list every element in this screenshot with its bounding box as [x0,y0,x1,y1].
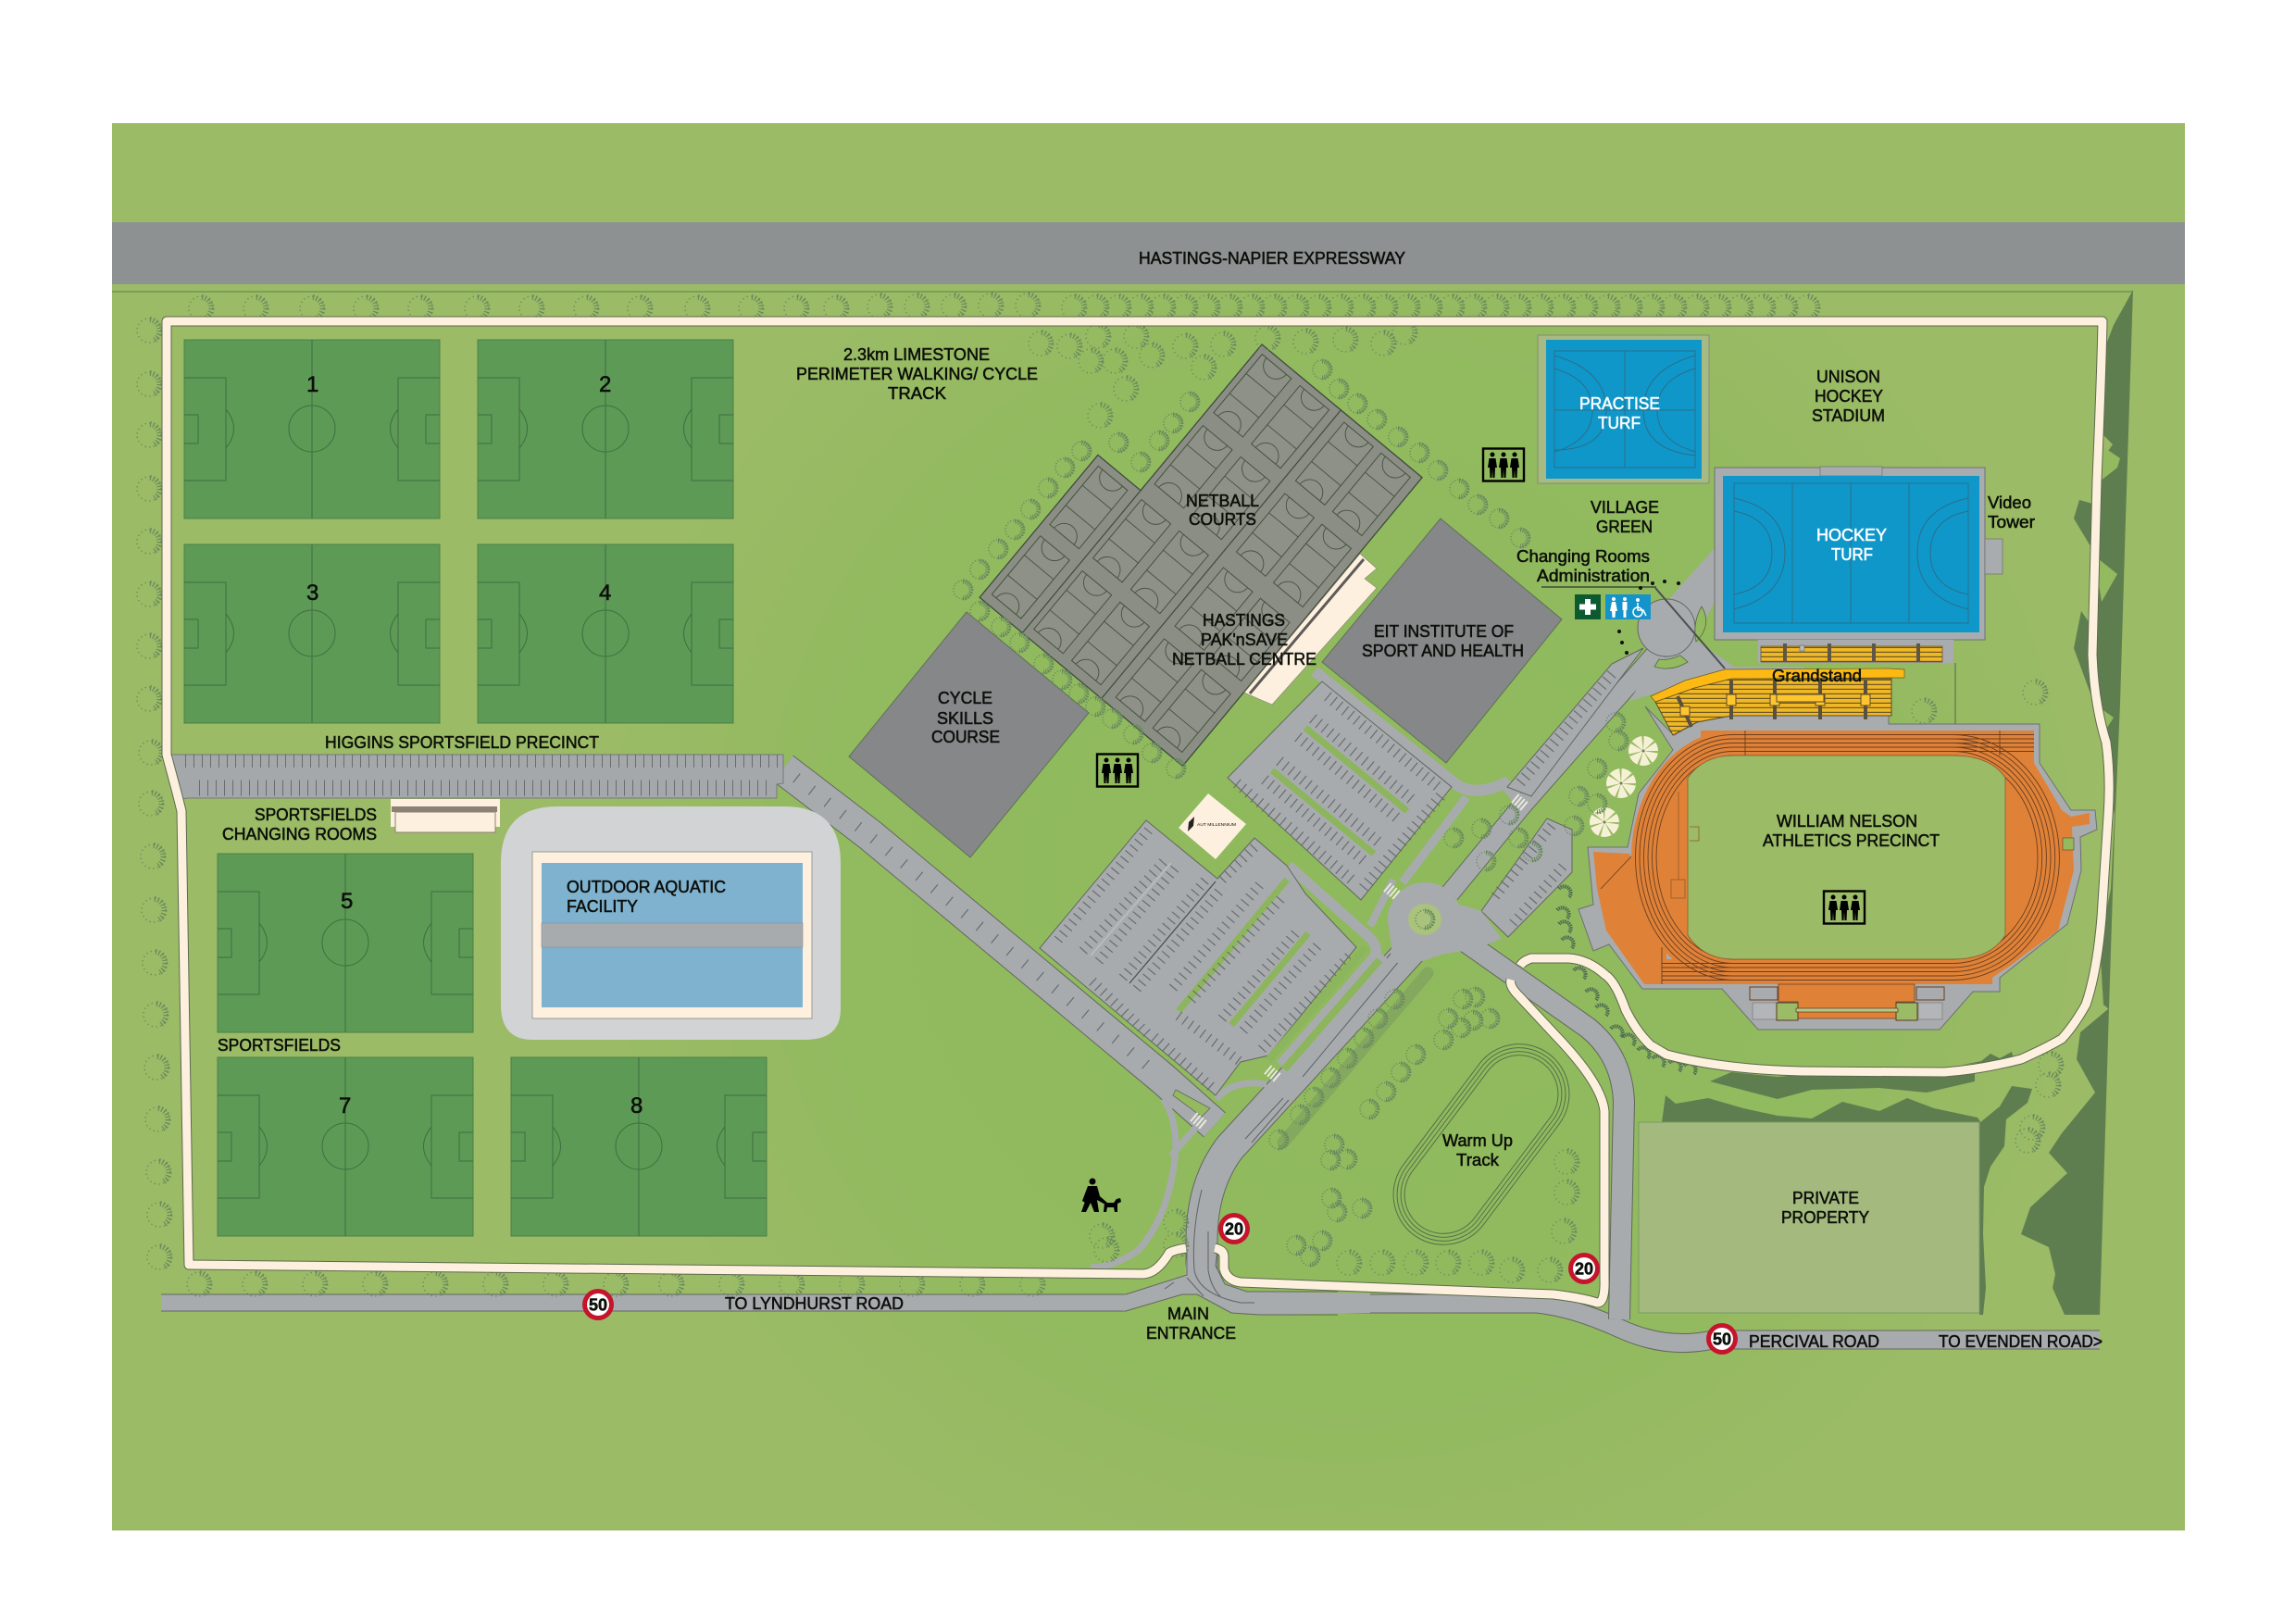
cycle skills course [849,612,1089,857]
Lyndhurst road [161,1294,1126,1311]
label: limestone track: PERIMETER WALKING/ CYCLE [796,364,1038,383]
speed sign 20 entrance [1218,1213,1250,1244]
label: sportsfields: SPORTSFIELDS [218,1035,341,1055]
label: limestone track: TRACK [888,383,947,403]
village green label: GREEN [1596,517,1653,536]
outdoor aquatic facility: OUTDOOR AQUATIC [567,877,726,896]
field numbers [306,372,643,1118]
label: Higgins precinct: HIGGINS SPORTSFIELD PRECINCT [325,732,599,752]
private property [1639,1122,1979,1313]
field 7 [218,1057,473,1236]
lower hockey stand [1758,640,1955,724]
label: Lyndhurst road: TO LYNDHURST ROAD [725,1293,904,1313]
grandstand [1651,666,1904,735]
tree shadow strip [1283,973,1428,1143]
AUT Millennium logo diamond [1179,793,1246,859]
cycle skills course: SKILLS [937,708,993,728]
track surround [1578,706,2097,1030]
field 4 [478,544,733,723]
netball courts [980,309,1422,766]
speed sign 50 west: 50 [589,1296,607,1315]
field 1 [184,340,440,518]
hockey stadium label: STADIUM [1812,406,1885,425]
netball courts label: NETBALL [1186,491,1259,510]
hockey hub paths [1629,548,1803,701]
field 8 [511,1057,767,1236]
cycle skills course: COURSE [931,727,1000,746]
hub green and access line [1541,580,1725,668]
speed sign 20 entrance: 20 [1225,1220,1243,1239]
trees beside track [1444,681,2063,1153]
video tower label: Video [1988,493,2031,512]
netball courts label [1186,491,1259,529]
trees south boundary [187,1210,1188,1296]
changing rooms and administration label: Changing Rooms [1516,546,1650,566]
label: expressway: HASTINGS-NAPIER EXPRESSWAY [1139,248,1405,268]
road crossings [1193,798,1526,1126]
main entrance junction [1123,1190,1370,1315]
field numbers: 7 [339,1093,351,1118]
practise turf: PRACTISE [1579,394,1660,413]
central car park south [1040,820,1356,1095]
field numbers: 4 [599,581,611,606]
label: limestone track: 2.3km LIMESTONE [843,344,990,364]
label: main entrance [1146,1304,1236,1343]
main road lane lines [1245,954,1400,1143]
EIT institute: EIT INSTITUTE OF [1374,621,1514,641]
east drive [1454,933,1624,1319]
central car park north [1228,681,1452,900]
private property: PROPERTY [1781,1207,1869,1227]
private property: PRIVATE [1792,1188,1859,1207]
trees warm up park [1269,988,1578,1282]
label: to Evenden road: TO EVENDEN ROAD> [1939,1331,2103,1351]
field numbers: 2 [599,372,611,397]
changing rooms and administration label [1516,546,1650,585]
map ground [112,123,2185,1530]
trees west boundary [137,319,171,1269]
athletics precinct label [1763,811,1940,850]
speed sign 50 Percival: 50 [1713,1330,1731,1348]
netball courts label: COURTS [1189,509,1256,529]
hockey turf: HOCKEY [1816,525,1887,544]
village green label: VILLAGE [1591,497,1659,517]
outdoor aquatic facility: FACILITY [567,896,638,916]
field numbers: 3 [306,581,318,606]
main entrance road [1202,950,1411,1287]
icon: toilets and accessible [1605,594,1651,619]
EIT institute [1322,518,1562,763]
icon: spectators netball [1097,754,1138,787]
umbrellas [1590,736,1658,837]
EIT institute: SPORT AND HEALTH [1362,641,1524,660]
speed sign 20 east [1568,1253,1600,1284]
netball centre label: NETBALL CENTRE [1172,649,1316,668]
sportsfields changing rooms [222,799,500,843]
eastern tree belt [2074,290,2133,1009]
speed sign 20 east: 20 [1575,1259,1593,1278]
south terrace [1750,984,1944,1020]
field numbers: 8 [630,1093,643,1118]
field 2 [478,340,733,518]
hockey stadium label [1812,367,1885,425]
car park beside track [1481,818,1572,937]
video tower label [1988,493,2035,531]
warm up track: Track [1456,1150,1500,1169]
perimeter walking and cycle track [167,321,2109,1303]
practise turf: TURF [1598,413,1641,432]
expressway band [112,222,2185,292]
light lobes in tree belt [2094,444,2120,736]
netball centre building [1244,554,1377,705]
field 5 [218,854,473,1032]
cycle skills course: CYCLE [938,688,992,707]
field numbers: 1 [306,372,318,397]
speed sign 50 west [582,1289,614,1320]
north-east road [1450,643,1665,893]
label: main entrance: MAIN [1167,1304,1209,1323]
road island [1173,1090,1210,1117]
netball centre label: HASTINGS [1203,610,1285,630]
warm up track: Warm Up [1442,1131,1513,1150]
label: main entrance: ENTRANCE [1146,1323,1236,1343]
hockey stadium label: UNISON [1816,367,1880,386]
label: limestone track [796,344,1038,403]
netball centre label: PAK'nSAVE [1201,630,1288,649]
car park access roads [1217,671,1523,1099]
diagonal service road [783,768,1215,1125]
outdoor aquatic facility [501,806,841,1040]
belt beside property [1979,1086,2032,1315]
athletics track [1593,731,2090,984]
Higgins car park [171,755,783,802]
athletics precinct label: WILLIAM NELSON [1777,811,1917,831]
athletics precinct label: ATHLETICS PRECINCT [1763,831,1940,850]
hockey turf [1715,467,2003,640]
roundabout [1388,882,1502,963]
video tower label: Tower [1988,512,2035,531]
practise turf [1538,335,1709,483]
north-east parking strip [1507,648,1643,796]
field numbers: 5 [341,889,353,914]
icon: person walking dog [1081,1178,1121,1212]
trees around netball [954,320,1529,778]
sportsfields changing rooms: CHANGING ROOMS [222,824,377,843]
AUT Millennium logo diamond: AUT MILLENNIUM [1197,822,1236,827]
hockey stadium label: HOCKEY [1815,386,1883,406]
icon: spectators athletics [1824,891,1865,924]
footpath link [1091,1099,1200,1268]
grandstand: Grandstand [1772,666,1862,685]
netball centre label [1172,610,1316,668]
Percival road [1333,1304,2100,1343]
hockey turf: TURF [1831,544,1873,564]
changing rooms and administration label: Administration [1537,566,1650,585]
sportsfields changing rooms: SPORTSFIELDS [255,805,377,824]
trees north boundary [189,294,1819,320]
central ground tint [602,292,2185,1530]
label: Percival road: PERCIVAL ROAD [1749,1331,1879,1351]
strips beside central car park [1268,947,1379,1069]
village green label [1591,497,1659,536]
warm up track [1373,1024,1590,1265]
hedge north of private property [1662,1052,2014,1123]
icon: spectators hockey [1483,448,1524,481]
field 3 [184,544,440,723]
belt south-east dark block [2021,1008,2109,1315]
icon: first aid [1575,594,1601,619]
football fields [184,340,767,1236]
speed sign 50 Percival [1706,1323,1738,1355]
